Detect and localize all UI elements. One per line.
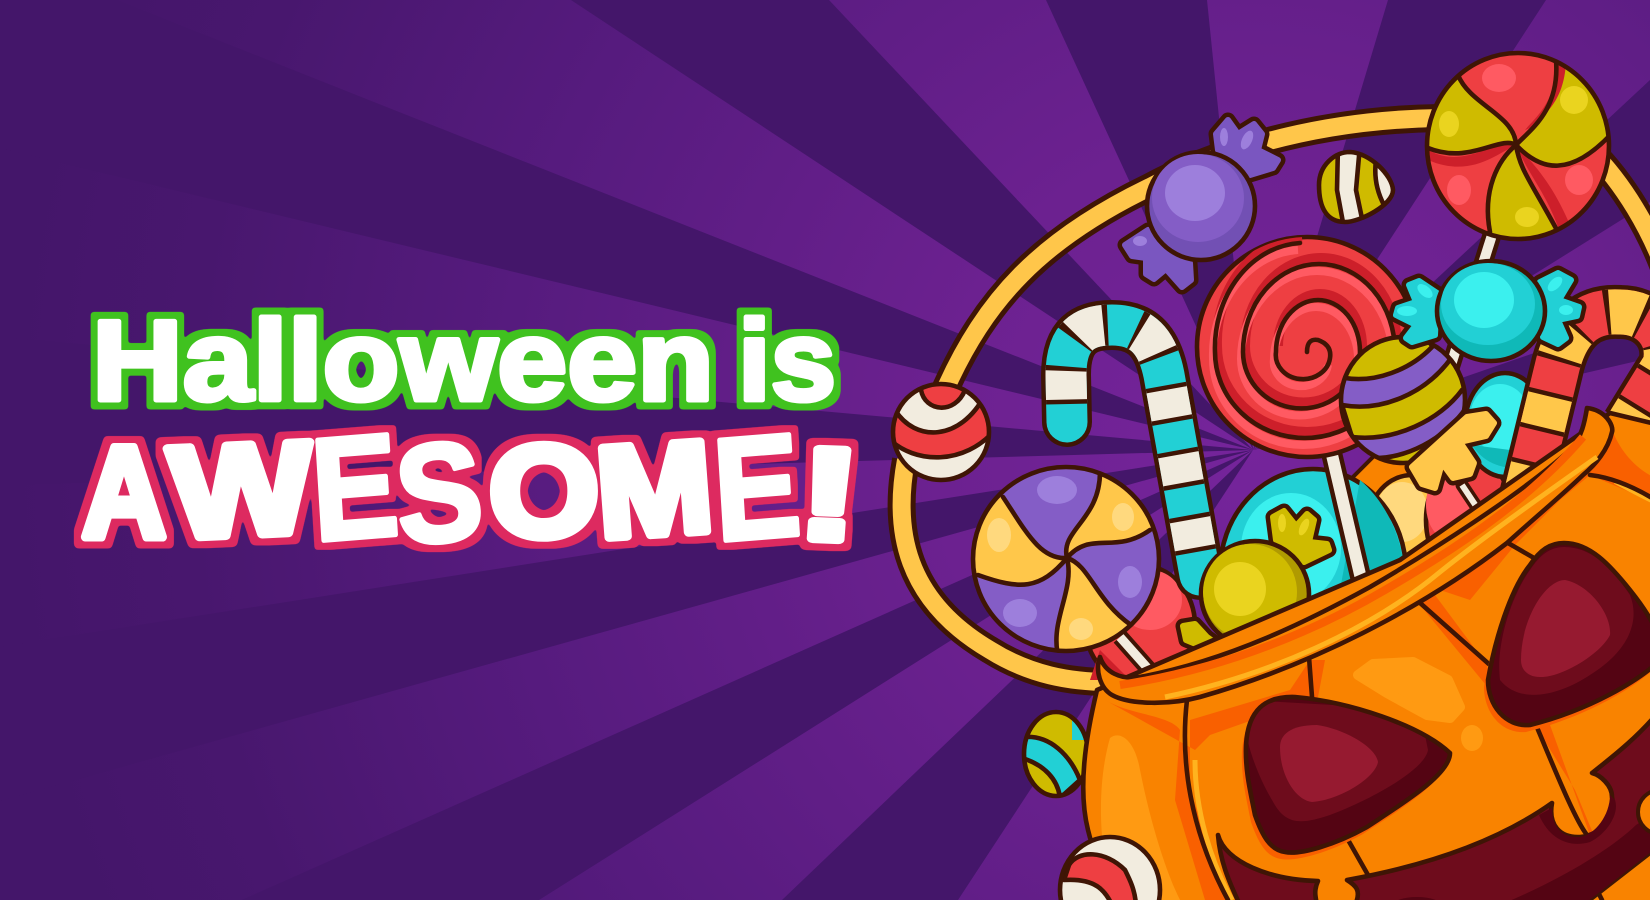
candy: teal wrapped sweet (1396, 261, 1579, 361)
title: AWESOME!: S (389, 411, 488, 575)
title: AWESOME!: E (306, 403, 403, 572)
pumpkin segment lines (1185, 475, 1650, 900)
candy: olive wrapped sweet (1183, 511, 1329, 658)
candy: purple wrapped sweet (1125, 120, 1278, 287)
lollipop: red spiral with stick (1197, 237, 1417, 600)
candy cane: red and yellow (1520, 312, 1650, 520)
title: AWESOME!: E (708, 403, 805, 572)
candy wrapper wings (1396, 273, 1579, 344)
title: AWESOME!: O (489, 418, 599, 564)
candy: red ball behind left lollipop (1085, 565, 1195, 685)
title: AWESOME!: M (592, 412, 718, 566)
lollipop stick core (1440, 235, 1492, 400)
title: AWESOME! (82, 403, 862, 575)
left eye (1242, 697, 1450, 860)
pumpkin rim (1098, 408, 1612, 703)
lollipop: red and olive pinwheel (1424, 50, 1612, 242)
title: AWESOME!: ! (795, 420, 862, 569)
candy: purple and olive striped ball (1338, 334, 1468, 466)
candy wrapper wings (1125, 120, 1278, 287)
candy wrapper wings (1183, 511, 1329, 658)
title: AWESOME!: A (82, 419, 166, 565)
candy: red ball with stick (1426, 458, 1514, 582)
pinwheel swirl lines (978, 472, 1150, 655)
candy: striped ball on handle (890, 382, 992, 482)
jack-o-lantern bucket (1083, 408, 1650, 900)
candy: big teal ball (1220, 469, 1406, 675)
lollipop: purple and yellow pinwheel (970, 464, 1162, 670)
candy cane: teal and cream (1066, 325, 1200, 575)
right eye (1484, 543, 1650, 732)
title: Halloween is: is (738, 298, 836, 425)
candy: corn sweet (1316, 150, 1396, 224)
mouth (1218, 710, 1650, 900)
title: AWESOME!: W (167, 413, 317, 566)
pumpkin body (1083, 413, 1650, 900)
candy: pale yellow ball (1369, 475, 1455, 569)
orange bucket back wall (1330, 455, 1440, 560)
bucket handle (902, 118, 1650, 682)
candy: small striped sweet behind bucket (1020, 710, 1090, 800)
pinwheel swirl lines (1428, 60, 1615, 232)
candy: striped ball over bucket corner (1058, 835, 1163, 900)
title: Halloween is: Halloween (92, 298, 714, 425)
lollipop stick behind teal sweet (1440, 235, 1492, 400)
pumpkin highlights (1101, 430, 1650, 900)
candy wrapper: yellow wings (1412, 414, 1494, 488)
spiral line (1215, 243, 1395, 438)
candy: teal ball behind wing (1465, 373, 1545, 477)
